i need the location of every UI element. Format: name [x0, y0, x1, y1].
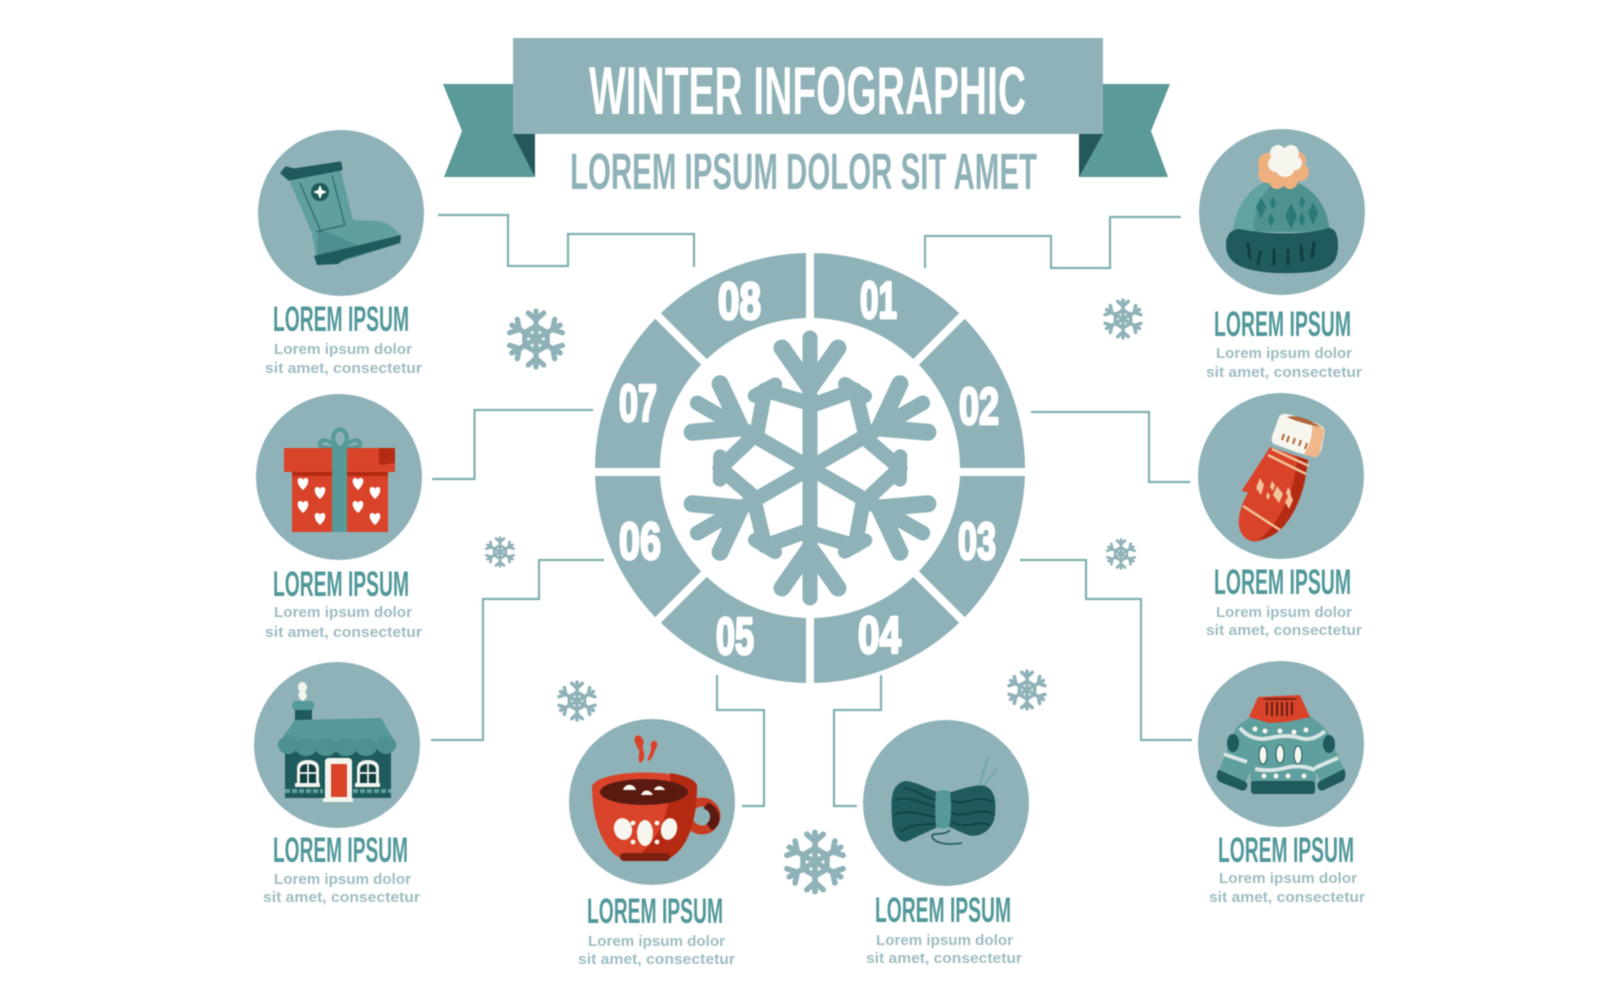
ribbon fold left — [513, 134, 535, 177]
segment 06 — [595, 476, 701, 617]
heading: LOREM IPSUM — [273, 300, 409, 339]
heading: LOREM IPSUM — [1218, 831, 1354, 870]
segment 04 — [814, 577, 959, 683]
segment 02: 02 — [959, 378, 999, 436]
description — [265, 341, 422, 377]
segmented number ring — [595, 253, 1025, 683]
description: sit amet, consectetur — [1206, 622, 1362, 639]
circle — [254, 662, 420, 828]
item: boot — [258, 130, 424, 377]
segment 06: 06 — [619, 513, 661, 571]
item: gift — [256, 394, 422, 641]
segment 07 — [595, 319, 701, 468]
segment 07: 07 — [619, 375, 657, 433]
item: yarn — [863, 720, 1029, 967]
connector lines — [431, 215, 1192, 806]
description: sit amet, consectetur — [265, 624, 422, 641]
description — [265, 604, 422, 641]
circle — [256, 394, 422, 560]
central snowflake — [669, 338, 951, 598]
description: sit amet, consectetur — [265, 360, 422, 377]
icon: house — [277, 682, 397, 802]
heading: LOREM IPSUM — [273, 565, 409, 604]
item: cocoa cup — [569, 719, 735, 968]
description: sit amet, consectetur — [578, 951, 735, 968]
icon: sweater — [1217, 695, 1345, 794]
description — [1206, 604, 1362, 639]
heading: LOREM IPSUM — [1214, 563, 1351, 602]
heading: LOREM IPSUM — [587, 892, 723, 931]
description: sit amet, consectetur — [263, 889, 420, 906]
segment 03: 03 — [958, 513, 996, 571]
segment 04: 04 — [858, 607, 901, 665]
segment 01 — [814, 253, 959, 359]
segment 03 — [919, 476, 1025, 617]
item: hat — [1199, 129, 1365, 381]
item: mitten — [1198, 393, 1364, 639]
segment 01: 01 — [860, 272, 897, 330]
title: WINTER INFOGRAPHIC — [589, 53, 1026, 129]
description: Lorem ipsum dolor — [274, 871, 411, 888]
description: sit amet, consectetur — [1209, 889, 1365, 906]
ribbon fold right — [1079, 134, 1103, 177]
circle — [1199, 129, 1365, 295]
heading: LOREM IPSUM — [273, 831, 408, 870]
ribbon tail right — [1079, 84, 1170, 177]
description: Lorem ipsum dolor — [1216, 604, 1352, 621]
banner panel — [513, 38, 1103, 134]
circle — [1198, 661, 1364, 827]
description: Lorem ipsum dolor — [1219, 870, 1357, 887]
segment 05 — [661, 577, 806, 683]
description: sit amet, consectetur — [866, 950, 1022, 967]
description — [1206, 345, 1362, 381]
item: house — [254, 662, 420, 906]
icon: yarn and needles — [892, 758, 998, 844]
subtitle: LOREM IPSUM DOLOR SIT AMET — [570, 143, 1037, 200]
description — [263, 871, 420, 906]
circle — [569, 719, 735, 885]
segment 02 — [919, 319, 1025, 468]
description — [1209, 870, 1365, 906]
title banner — [443, 38, 1170, 177]
heading: LOREM IPSUM — [875, 891, 1011, 930]
icon: boot — [282, 163, 401, 265]
icon: gift box — [284, 430, 395, 532]
description: Lorem ipsum dolor — [1216, 345, 1352, 362]
icon: cup — [592, 735, 718, 861]
segment 05: 05 — [716, 608, 754, 666]
description — [866, 932, 1022, 967]
description: Lorem ipsum dolor — [274, 604, 412, 621]
description: sit amet, consectetur — [1206, 364, 1362, 381]
description — [578, 933, 735, 968]
item: sweater — [1198, 661, 1365, 906]
description: Lorem ipsum dolor — [274, 341, 412, 358]
segment 08: 08 — [718, 273, 761, 331]
segment 08 — [661, 253, 806, 359]
heading: LOREM IPSUM — [1214, 305, 1351, 344]
ribbon tail left — [443, 84, 535, 177]
icon: hat — [1226, 145, 1338, 273]
circle — [258, 130, 424, 296]
decorative snowflakes — [485, 300, 1143, 892]
description: Lorem ipsum dolor — [588, 933, 725, 950]
icon: mitten — [1239, 414, 1325, 541]
circle — [863, 720, 1029, 886]
description: Lorem ipsum dolor — [876, 932, 1013, 949]
circle — [1198, 393, 1364, 559]
